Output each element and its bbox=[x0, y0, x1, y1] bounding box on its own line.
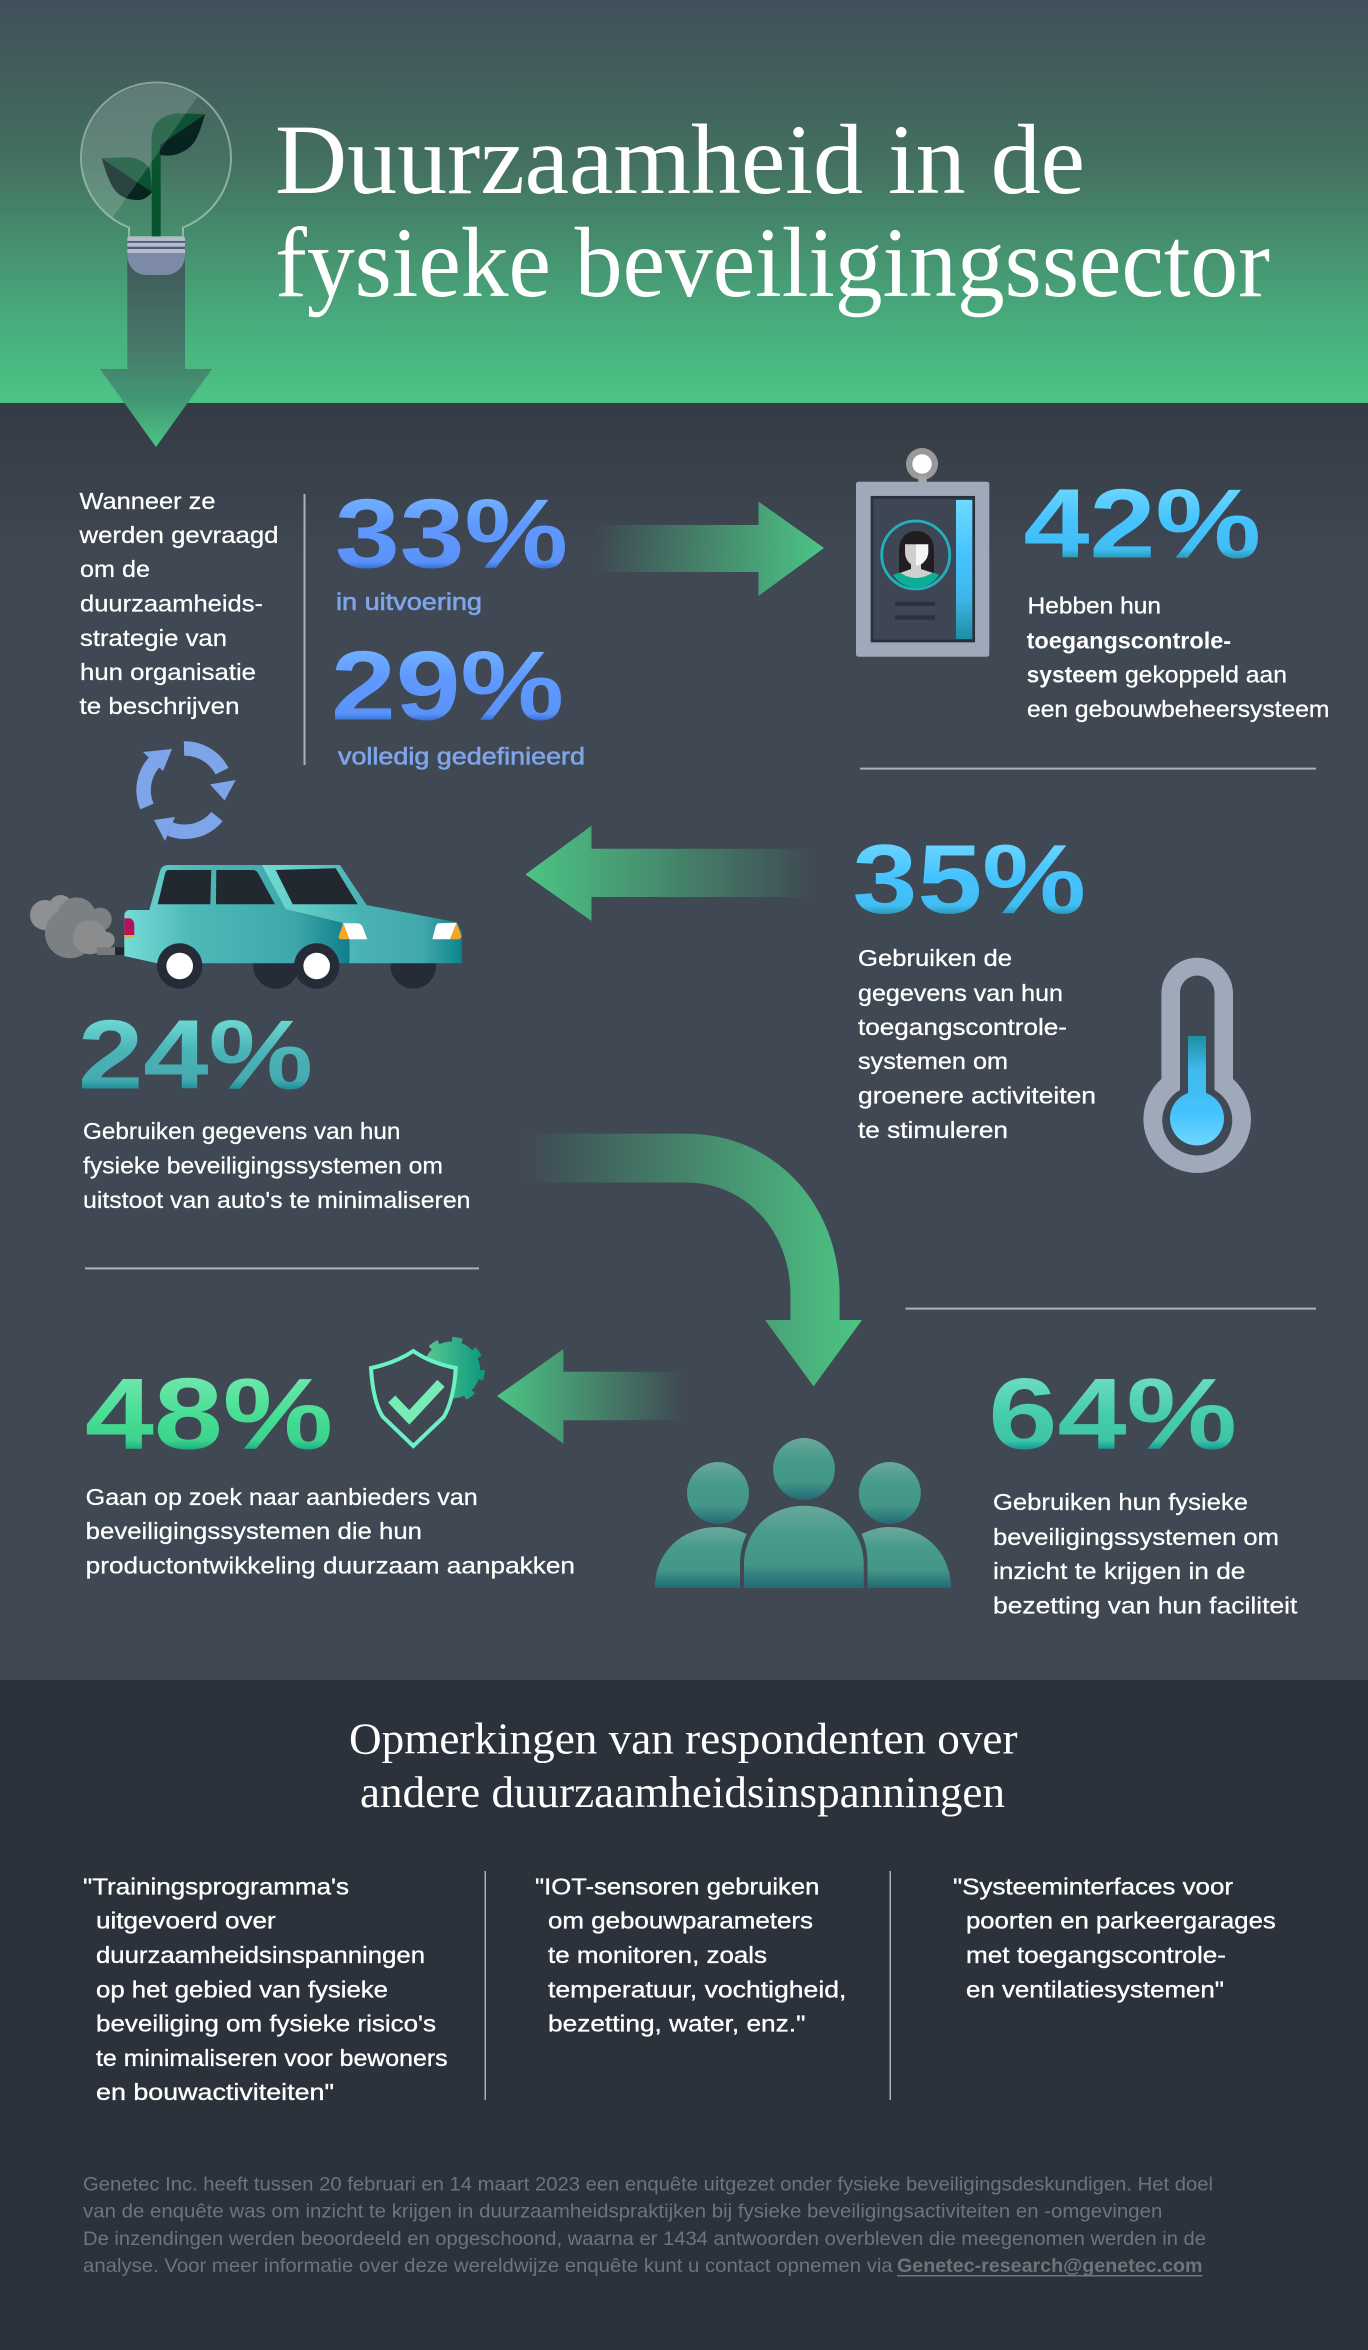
title: fysieke beveiligingssector bbox=[275, 207, 1270, 318]
arrow: down from light bulb bbox=[100, 250, 212, 447]
text: 35% description: Gebruiken de bbox=[858, 945, 1012, 971]
stat: 42%: 42% bbox=[1024, 468, 1261, 578]
text: 24% description: fysieke beveiligingssystemen om bbox=[83, 1152, 443, 1178]
label: in uitvoering: in uitvoering bbox=[336, 589, 482, 616]
text: 24% description: uitstoot van auto's te minimaliseren bbox=[83, 1187, 470, 1213]
intro text block: te beschrijven bbox=[80, 693, 240, 719]
text: 42% description: systeem bbox=[1027, 661, 1118, 687]
text: 35% description: systemen om bbox=[858, 1048, 1008, 1074]
quote: training programmes: te minimaliseren voor bewoners bbox=[96, 2045, 448, 2071]
text: 42% description: Hebben hun bbox=[1028, 592, 1161, 618]
quote: IoT sensors: om gebouwparameters bbox=[548, 1908, 813, 1934]
quote: IoT sensors: temperatuur, vochtigheid, bbox=[548, 1977, 846, 2003]
heading: comments bbox=[349, 1714, 1018, 1817]
text: 35% description: gegevens van hun bbox=[858, 980, 1063, 1006]
arrow: curved down to people bbox=[522, 1134, 862, 1386]
text: 42% description: gekoppeld aan bbox=[1125, 661, 1287, 687]
text: 35% description: toegangscontrole- bbox=[858, 1014, 1067, 1040]
quote: system interfaces: met toegangscontrole- bbox=[966, 1942, 1226, 1968]
quote: training programmes: uitgevoerd over bbox=[96, 1908, 276, 1934]
intro text block: hun organisatie bbox=[80, 659, 256, 685]
divider: quotes 2 bbox=[890, 1871, 891, 2100]
icon: thermometer bbox=[1143, 958, 1251, 1173]
footer: survey note: Genetec Inc. heeft tussen 20 februari en 14 maart 2023 een enquête uitgezet onder fysieke beveiligingsdeskundigen. Het doel bbox=[83, 2173, 1213, 2195]
quote: training programmes bbox=[83, 1874, 448, 2105]
text: 42% description: toegangscontrole- bbox=[1027, 627, 1231, 653]
divider: intro bbox=[304, 494, 306, 765]
icon: light bulb with plant bbox=[80, 82, 232, 275]
text: 35% description: te stimuleren bbox=[858, 1117, 1008, 1143]
heading: comments: andere duurzaamheidsinspanningen bbox=[360, 1768, 1005, 1817]
quote: training programmes: op het gebied van fysieke bbox=[96, 1977, 388, 2003]
text: 48% description: Gaan op zoek naar aanbieders van bbox=[86, 1484, 478, 1510]
arrow: left to 48% bbox=[497, 1349, 686, 1444]
label: volledig gedefinieerd: volledig gedefinieerd bbox=[338, 744, 585, 770]
divider: under 42% bbox=[860, 768, 1316, 770]
text: 42% description bbox=[1027, 592, 1329, 722]
footer: survey note: Genetec-research@genetec.com bbox=[897, 2255, 1202, 2277]
quote: system interfaces: "Systeeminterfaces voor bbox=[953, 1874, 1233, 1900]
quote: IoT sensors bbox=[535, 1874, 846, 2036]
quote: system interfaces: poorten en parkeergarages bbox=[966, 1908, 1276, 1934]
text: 64% description: inzicht te krijgen in de bbox=[993, 1558, 1245, 1584]
text: 24% description: Gebruiken gegevens van hun bbox=[83, 1118, 400, 1144]
intro text block: Wanneer ze bbox=[80, 488, 216, 514]
text: 35% description: groenere activiteiten bbox=[858, 1083, 1096, 1109]
arrow: left to car bbox=[525, 826, 818, 921]
footer: survey note bbox=[83, 2173, 1213, 2277]
icon: shield with gear bbox=[371, 1340, 482, 1446]
icon: ID badge bbox=[856, 448, 989, 657]
text: 64% description: Gebruiken hun fysieke bbox=[993, 1489, 1248, 1515]
quote: system interfaces: en ventilatiesystemen" bbox=[966, 1977, 1224, 2003]
icon: group of people bbox=[655, 1438, 951, 1588]
text: 24% description bbox=[83, 1118, 470, 1213]
text: 42% description: een gebouwbeheersysteem bbox=[1027, 696, 1329, 722]
intro text block: werden gevraagd bbox=[78, 522, 279, 548]
text: 64% description: beveiligingssystemen om bbox=[993, 1524, 1279, 1550]
header band bbox=[0, 0, 1368, 403]
panel: respondent comments bbox=[0, 1680, 1368, 2350]
text: 35% description bbox=[858, 945, 1096, 1143]
intro text block: om de bbox=[80, 556, 150, 582]
stat: 29%: 29% bbox=[331, 630, 564, 740]
quote: training programmes: duurzaamheidsinspanningen bbox=[96, 1942, 425, 1968]
text: 48% description: productontwikkeling duurzaam aanpakken bbox=[86, 1553, 575, 1579]
stat: 64%: 64% bbox=[988, 1358, 1237, 1470]
footer: survey note: De inzendingen werden beoordeeld en opgeschoond, waarna er 1434 antwoorden overbleven die meegenomen werden in de bbox=[83, 2228, 1206, 2250]
intro text block: strategie van bbox=[80, 625, 227, 651]
quote: IoT sensors: "IOT-sensoren gebruiken bbox=[535, 1874, 819, 1900]
text: 64% description: bezetting van hun faciliteit bbox=[993, 1593, 1298, 1619]
quote: training programmes: "Trainingsprogramma's bbox=[83, 1874, 349, 1900]
heading: comments: Opmerkingen van respondenten over bbox=[349, 1714, 1018, 1763]
text: 64% description bbox=[993, 1489, 1298, 1619]
footer: survey note: analyse. Voor meer informatie over deze wereldwijze enquête kunt u contact opnemen via bbox=[83, 2255, 893, 2277]
quote: system interfaces bbox=[953, 1874, 1276, 2003]
arrow: right to 42% bbox=[594, 502, 824, 596]
icon: recycle arrows bbox=[143, 748, 236, 841]
text: 48% description bbox=[86, 1484, 575, 1579]
page background bbox=[0, 403, 1368, 1680]
icon: car with exhaust smoke bbox=[30, 865, 462, 989]
quote: training programmes: beveiliging om fysieke risico's bbox=[96, 2010, 436, 2036]
stat: 48%: 48% bbox=[85, 1358, 333, 1470]
intro text block bbox=[78, 488, 279, 719]
stat: 33%: 33% bbox=[335, 478, 568, 588]
divider: quotes 1 bbox=[484, 1871, 486, 2100]
divider: above 64% bbox=[906, 1308, 1316, 1310]
stat: 35%: 35% bbox=[852, 824, 1086, 934]
quote: training programmes: en bouwactiviteiten" bbox=[96, 2079, 334, 2105]
footer: survey note: van de enquête was om inzicht te krijgen in duurzaamheidspraktijken bij fysieke beveiligingsactiviteiten en -omgevingen bbox=[83, 2201, 1162, 2223]
quote: IoT sensors: te monitoren, zoals bbox=[548, 1942, 767, 1968]
title: Duurzaamheid in de bbox=[275, 104, 1085, 215]
divider: under 24% bbox=[85, 1267, 479, 1269]
stat: 24%: 24% bbox=[78, 1000, 313, 1110]
intro text block: duurzaamheids- bbox=[80, 590, 263, 616]
quote: IoT sensors: bezetting, water, enz." bbox=[548, 2010, 805, 2036]
text: 48% description: beveiligingssystemen die hun bbox=[86, 1518, 422, 1544]
title bbox=[275, 104, 1270, 318]
